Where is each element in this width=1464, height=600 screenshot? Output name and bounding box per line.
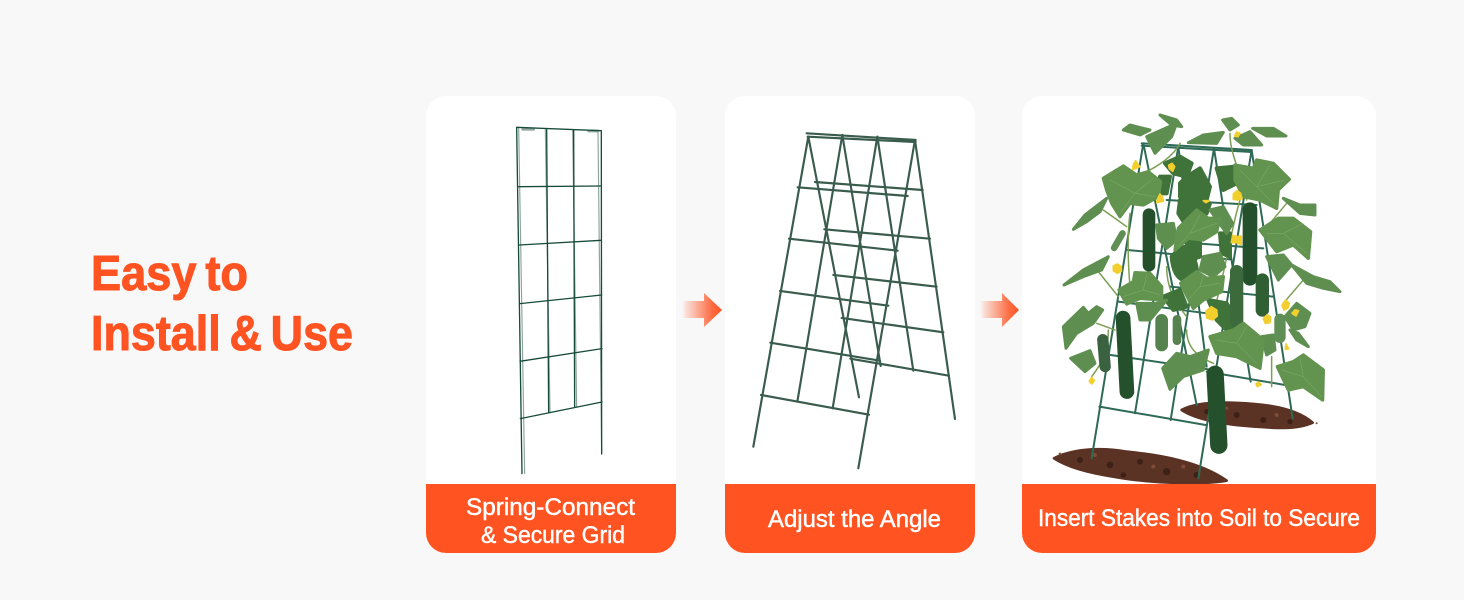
title: Easy to Install & Use: Install & Use xyxy=(91,307,353,361)
arrow: step 1 to step 2 xyxy=(682,293,722,327)
illustration: opened A-frame trellis xyxy=(753,133,955,468)
trellis frame xyxy=(1092,143,1293,478)
caption: Spring-Connect & Secure Grid: & Secure Grid xyxy=(481,522,625,549)
dark foliage behind xyxy=(1158,157,1240,330)
soil mounds xyxy=(1054,403,1318,483)
caption: Spring-Connect & Secure Grid xyxy=(466,494,635,549)
flowers xyxy=(1089,132,1299,387)
cucumbers xyxy=(1097,202,1286,454)
caption: Adjust the Angle: Adjust the Angle xyxy=(768,506,941,533)
illustration: flat folded trellis grid xyxy=(517,127,602,474)
large front leaves xyxy=(1103,160,1323,400)
caption: Spring-Connect & Secure Grid: Spring-Connect xyxy=(466,494,635,521)
illustration: trellis with cucumber plant in soil xyxy=(1054,115,1340,483)
panel: step 2 adjust the angle xyxy=(725,96,975,553)
arrow: step 2 to step 3 xyxy=(980,293,1019,327)
title: Easy to Install & Use xyxy=(91,247,353,361)
panel: step 3 insert stakes into soil xyxy=(1022,96,1376,553)
stems xyxy=(1092,133,1303,387)
caption: Insert Stakes into Soil to Secure: Insert Stakes into Soil to Secure xyxy=(1038,505,1360,532)
leaf veins xyxy=(1110,165,1322,397)
panel: step 1 spring-connect and secure grid xyxy=(426,96,676,553)
leaves xyxy=(1063,115,1340,389)
title: Easy to Install & Use: Easy to xyxy=(91,247,248,301)
